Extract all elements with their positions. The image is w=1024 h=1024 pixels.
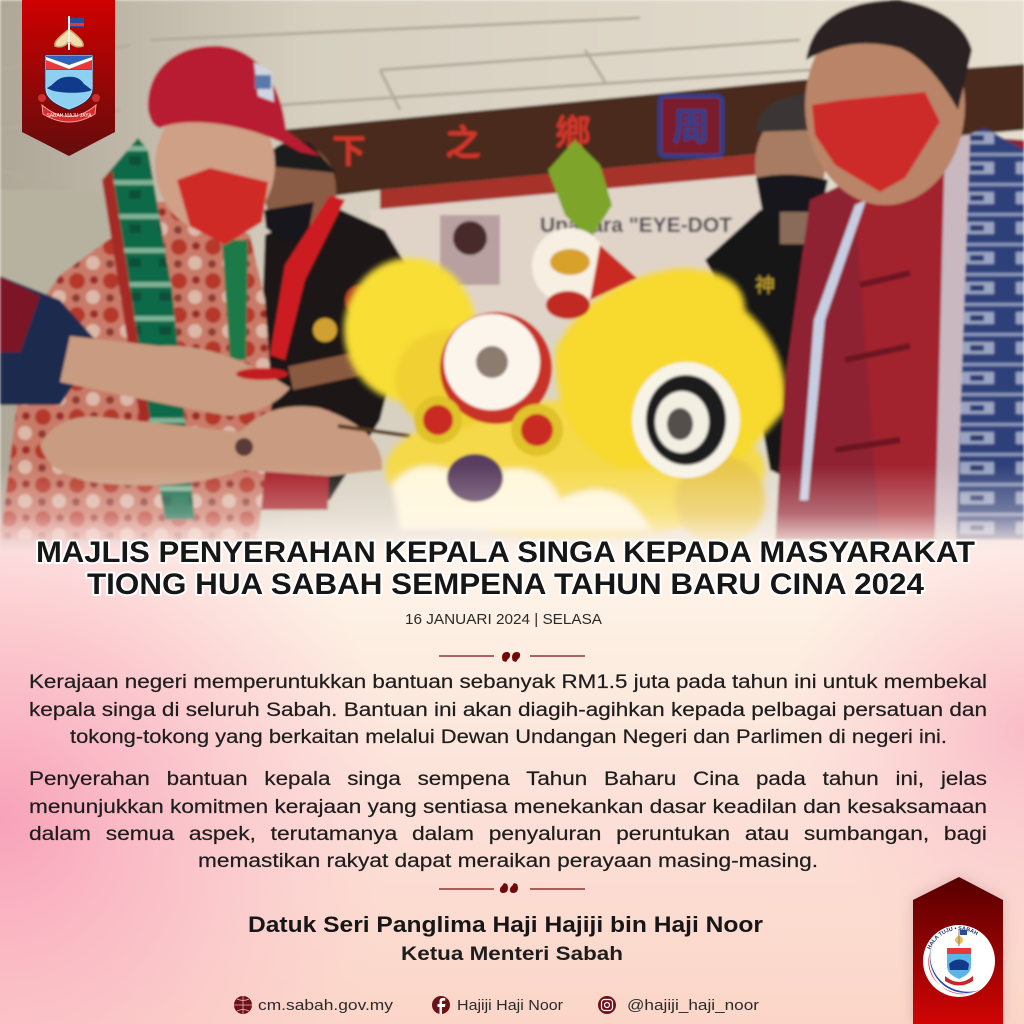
title: MAJLIS PENYERAHAN KEPALA SINGA KEPADA MASYARAKAT bbox=[36, 536, 975, 569]
blue-framed sign bbox=[660, 96, 722, 156]
left man's mask bbox=[177, 168, 268, 245]
paragraph 2: memastikan rakyat dapat meraikan perayaan masing-masing. bbox=[198, 851, 818, 872]
paragraph 1 bbox=[29, 672, 987, 748]
paragraph 2: dalam semua aspek, terutamanya dalam penyaluran peruntukan atau sumbangan, bagi bbox=[29, 824, 987, 845]
paragraph 2: Penyerahan bantuan kepala singa sempena Tahun Baharu Cina pada tahun ini, jelas bbox=[29, 769, 987, 790]
wooden sign band: 鄉 bbox=[555, 112, 591, 153]
icon: flag bbox=[69, 16, 84, 50]
man in middle with red scarf bbox=[260, 142, 404, 512]
footer: website: cm.sabah.gov.my bbox=[258, 997, 394, 1014]
man on right bbox=[775, 0, 1024, 540]
extended arm with blue sleeve bbox=[0, 276, 362, 416]
icon: crest hands bbox=[55, 30, 83, 47]
paragraph 1: kepala singa di seluruh Sabah. Bantuan ini akan diagih-agihkan kepada pelbagai persatuan dan bbox=[29, 700, 987, 721]
title bbox=[36, 536, 975, 601]
speaker role: Ketua Menteri Sabah bbox=[401, 944, 623, 965]
footer: instagram bbox=[598, 996, 759, 1014]
speaker name: Datuk Seri Panglima Haji Hajiji bin Haji Noor bbox=[248, 912, 763, 937]
wooden sign band: 下 bbox=[332, 133, 366, 171]
quote divider top bbox=[439, 652, 585, 662]
badge: top-left ribbon with state crest bbox=[22, 0, 115, 156]
paragraph 2: menunjukkan komitmen kerajaan yang sentiasa menekankan dasar keadilan dan kesaksamaan bbox=[29, 797, 987, 818]
title: TIONG HUA SABAH SEMPENA TAHUN BARU CINA 2024 bbox=[87, 568, 924, 601]
man in back right: 神 bbox=[755, 274, 775, 297]
paragraph 2 bbox=[29, 769, 987, 872]
backdrop poster: Upacara "EYE-DOT bbox=[540, 214, 732, 237]
footer: website bbox=[234, 996, 394, 1014]
icon: shield bbox=[45, 55, 93, 110]
lion horn and leaves bbox=[532, 140, 637, 319]
footer: instagram: @hajiji_haji_noor bbox=[627, 997, 759, 1014]
paragraph 1: Kerajaan negeri memperuntukkan bantuan sebanyak RM1.5 juta pada tahun ini untuk membekal bbox=[29, 672, 987, 693]
quote divider bottom bbox=[439, 883, 585, 893]
lower arm holding brush bbox=[40, 406, 410, 485]
lion body fur bbox=[344, 258, 786, 545]
icon: motto scroll bbox=[38, 94, 100, 122]
lion head bbox=[344, 140, 786, 545]
lion forehead ball bbox=[440, 312, 552, 424]
icon: circular emblem: HALA TUJU • SABAH bbox=[926, 926, 978, 950]
icon: facebook bbox=[432, 996, 450, 1014]
icon: circular emblem bbox=[923, 925, 995, 997]
man in back right bbox=[704, 94, 830, 476]
wooden sign band bbox=[284, 62, 1024, 235]
lion red ornaments bbox=[414, 396, 563, 502]
icon: motto scroll: SABAH MAJU JAYA bbox=[46, 113, 92, 119]
man on left: body and shirt bbox=[0, 97, 275, 540]
paragraph 1: tokong-tokong yang berkaitan melalui Dewan Undangan Negeri dan Parlimen di negeri ini. bbox=[70, 727, 947, 748]
footer: facebook: Hajiji Haji Noor bbox=[457, 997, 563, 1014]
badge: bottom-right ribbon with circular logo bbox=[908, 875, 1008, 1024]
ceiling background bbox=[0, 0, 1024, 560]
blue-framed sign: 周 bbox=[672, 107, 710, 149]
date: 16 JANUARI 2024 | SELASA bbox=[405, 612, 602, 628]
photo: lion head handover ceremony bbox=[0, 0, 1024, 560]
icon: instagram bbox=[598, 996, 616, 1014]
lion eye bbox=[632, 362, 740, 478]
wooden sign band: 之 bbox=[445, 122, 481, 163]
icon: globe bbox=[234, 996, 252, 1014]
left man's red cap bbox=[148, 46, 320, 156]
backdrop poster bbox=[440, 214, 732, 285]
